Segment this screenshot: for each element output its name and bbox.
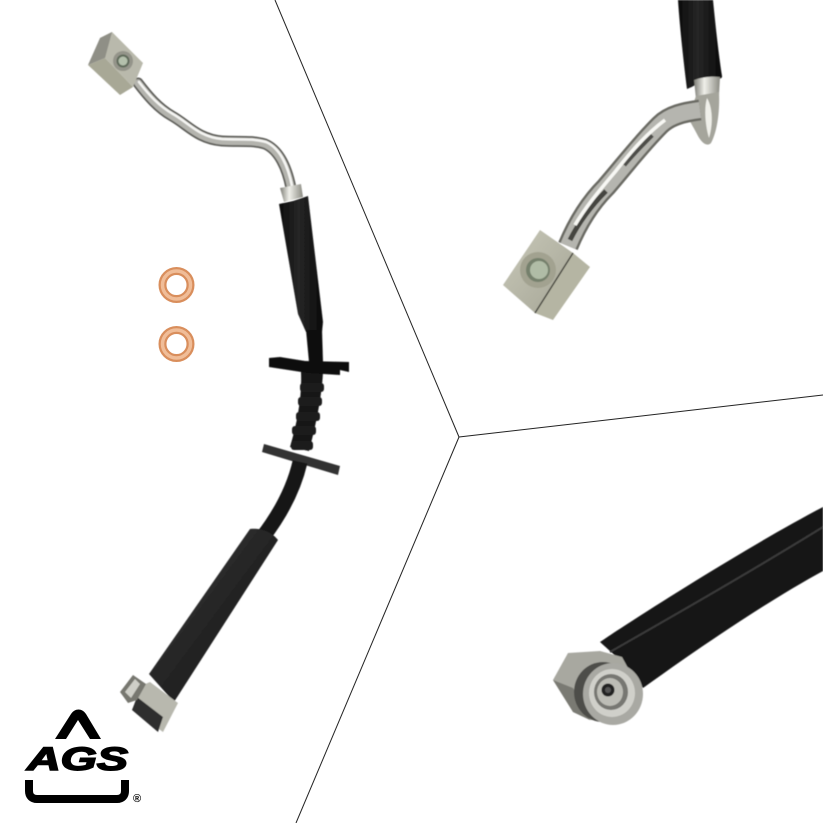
AGS logo: [26, 710, 141, 805]
bent tip: [688, 92, 719, 145]
bottom right panel: hose end detail: [553, 507, 823, 725]
thick black hose: [600, 507, 823, 688]
square block fitting: [88, 32, 143, 95]
copper washer top: [162, 271, 190, 299]
black sleeve: [678, 0, 722, 89]
divider lines: [275, 0, 823, 823]
logo bottom bracket: [29, 780, 125, 799]
hose seam: [610, 527, 823, 652]
middle hose with ribbed guard: [290, 330, 324, 451]
logo top triangle: [55, 710, 101, 739]
lower clip: [262, 444, 340, 475]
round bolt head: [574, 662, 643, 725]
upper clip: [269, 357, 349, 375]
logo wordmark: AGS: [26, 741, 129, 777]
lower black sleeve: [149, 529, 278, 702]
copper washer bottom: [162, 330, 190, 358]
upper black sleeve: [279, 196, 323, 332]
square block: [503, 230, 590, 320]
registered mark: ®: [133, 793, 141, 805]
left panel: full brake hose: [88, 32, 349, 732]
lower fitting: [120, 675, 178, 732]
ferrule: [694, 77, 720, 99]
hex nut: [553, 651, 640, 720]
top right panel: tube detail: [503, 0, 722, 320]
metal tube: [568, 110, 700, 246]
lower thin hose: [262, 462, 300, 538]
tube ferrule: [280, 184, 303, 202]
metal tube: [138, 82, 292, 188]
